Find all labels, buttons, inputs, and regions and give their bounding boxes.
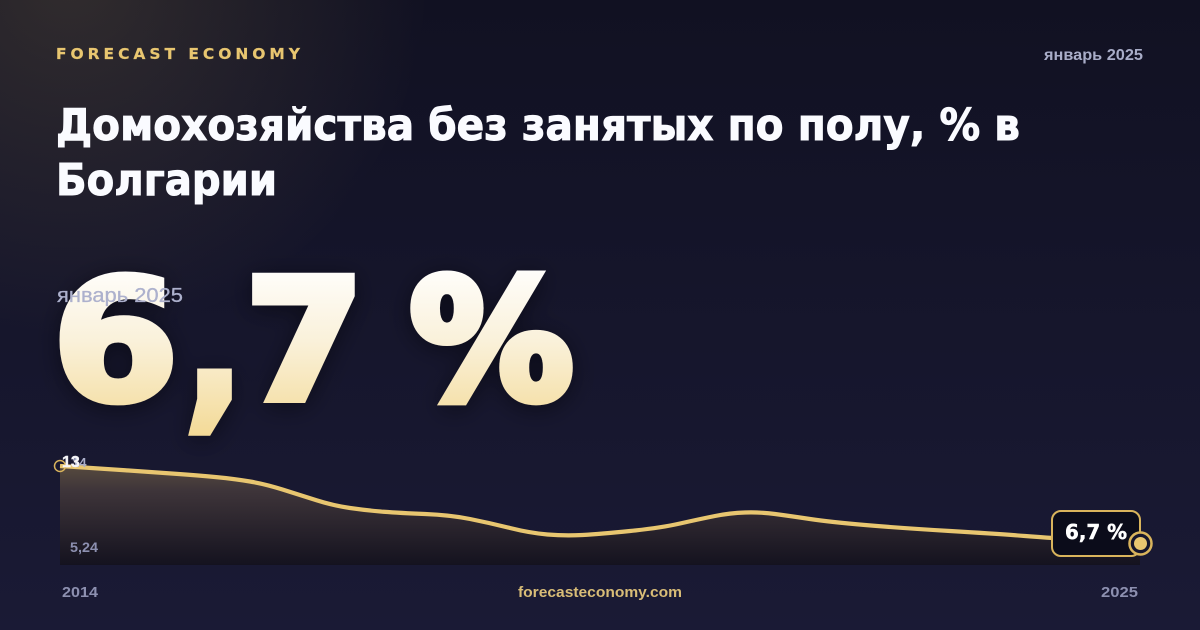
brand label: FORECAST ECONOMY (56, 45, 301, 63)
max label: 14 (72, 455, 87, 470)
big value: 7 (246, 245, 363, 437)
title: Болгарии (56, 155, 277, 206)
big value: % (410, 245, 573, 437)
date over value: январь 2025 (57, 285, 183, 307)
line chart (54, 454, 1152, 565)
chart area (60, 466, 1140, 565)
max label: 13 (62, 454, 80, 471)
axis end year: 2025 (1101, 584, 1138, 601)
min label: 5,24 (70, 539, 98, 555)
end marker (1130, 532, 1152, 554)
big value (52, 232, 573, 452)
site url: forecasteconomy.com (518, 584, 682, 601)
chart line (60, 466, 1140, 543)
value callout: 6,7 % (1065, 520, 1127, 544)
big value: 6 (52, 244, 179, 440)
title: Домохозяйства без занятых по полу, % в (56, 100, 1020, 151)
value callout (1052, 511, 1140, 556)
big value: , (182, 232, 247, 452)
start marker (54, 460, 66, 472)
title (56, 100, 1020, 206)
axis start year: 2014 (62, 584, 99, 601)
date top right: январь 2025 (1044, 47, 1143, 64)
